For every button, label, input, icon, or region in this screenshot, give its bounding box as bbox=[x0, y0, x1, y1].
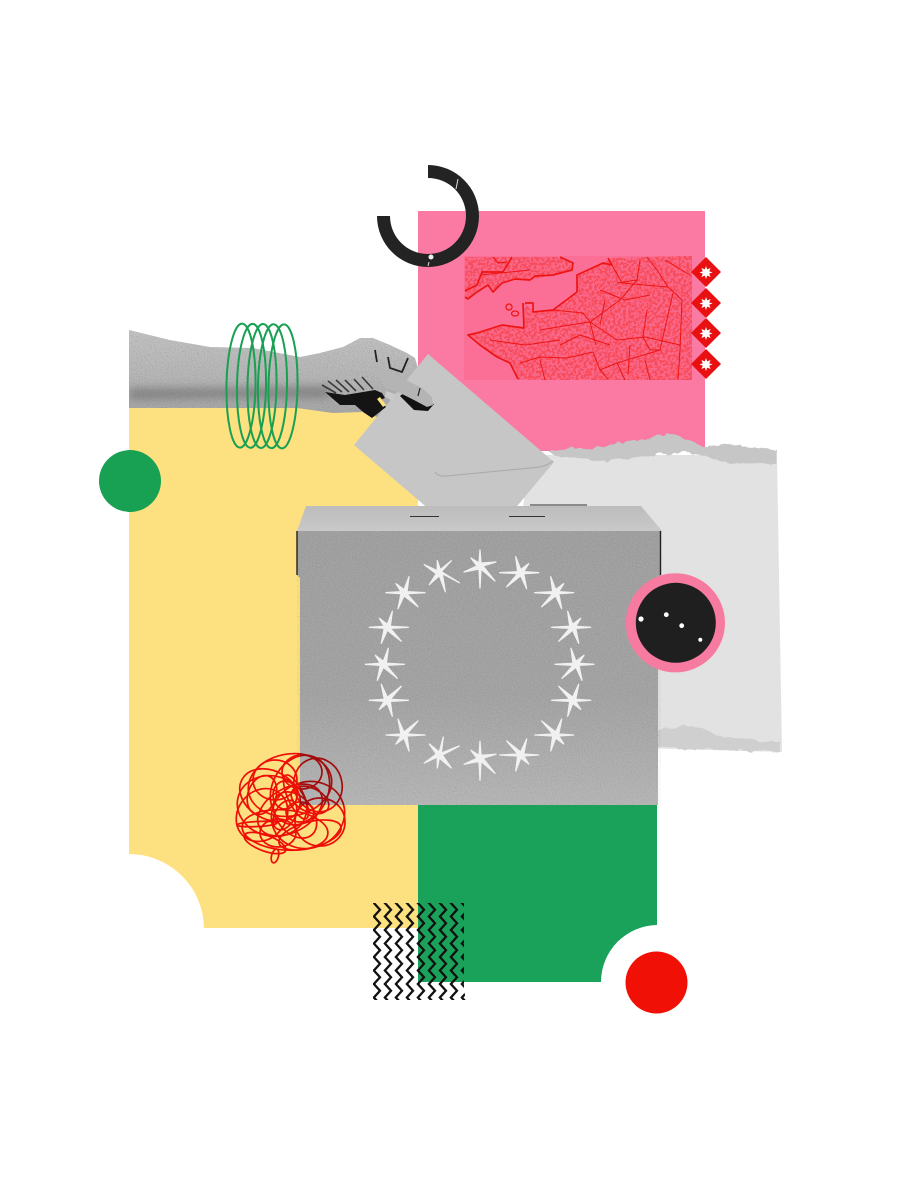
map of the Channel in red bbox=[464, 256, 692, 380]
green circle bbox=[99, 450, 161, 512]
green bangles bbox=[225, 323, 299, 449]
knuckle creases bbox=[322, 377, 373, 393]
torn grey paper bbox=[520, 433, 782, 752]
green paper bbox=[418, 805, 657, 982]
arm shadow band bbox=[129, 386, 330, 400]
box slot marks bbox=[410, 505, 587, 516]
finger lines bbox=[375, 350, 408, 372]
ring of EU stars bbox=[365, 550, 594, 780]
palm shadow bbox=[325, 390, 385, 412]
diamond 2 bbox=[691, 288, 721, 318]
black ring arc bbox=[377, 165, 479, 267]
thumb holding the envelope bbox=[363, 363, 434, 418]
red diamonds with stars bbox=[691, 257, 721, 379]
box edge shadows bbox=[297, 531, 660, 575]
diamond 1 bbox=[691, 257, 721, 287]
night sky circle with pink border bbox=[626, 573, 725, 672]
diamond 4 bbox=[691, 349, 721, 379]
box body bbox=[297, 531, 661, 805]
diamond 3 bbox=[691, 318, 721, 348]
red scribble bbox=[226, 746, 354, 864]
panel: pink paper bbox=[418, 211, 705, 451]
hand and arm bbox=[129, 330, 418, 417]
panel: yellow paper bbox=[129, 408, 418, 928]
box flap bbox=[297, 506, 662, 531]
zigzag pattern bbox=[373, 903, 466, 1000]
collage illustration bbox=[99, 165, 782, 1014]
box grain bbox=[297, 531, 661, 805]
red circle bbox=[626, 952, 688, 1014]
ballot envelope bbox=[354, 354, 554, 517]
ballot box bbox=[297, 505, 662, 805]
